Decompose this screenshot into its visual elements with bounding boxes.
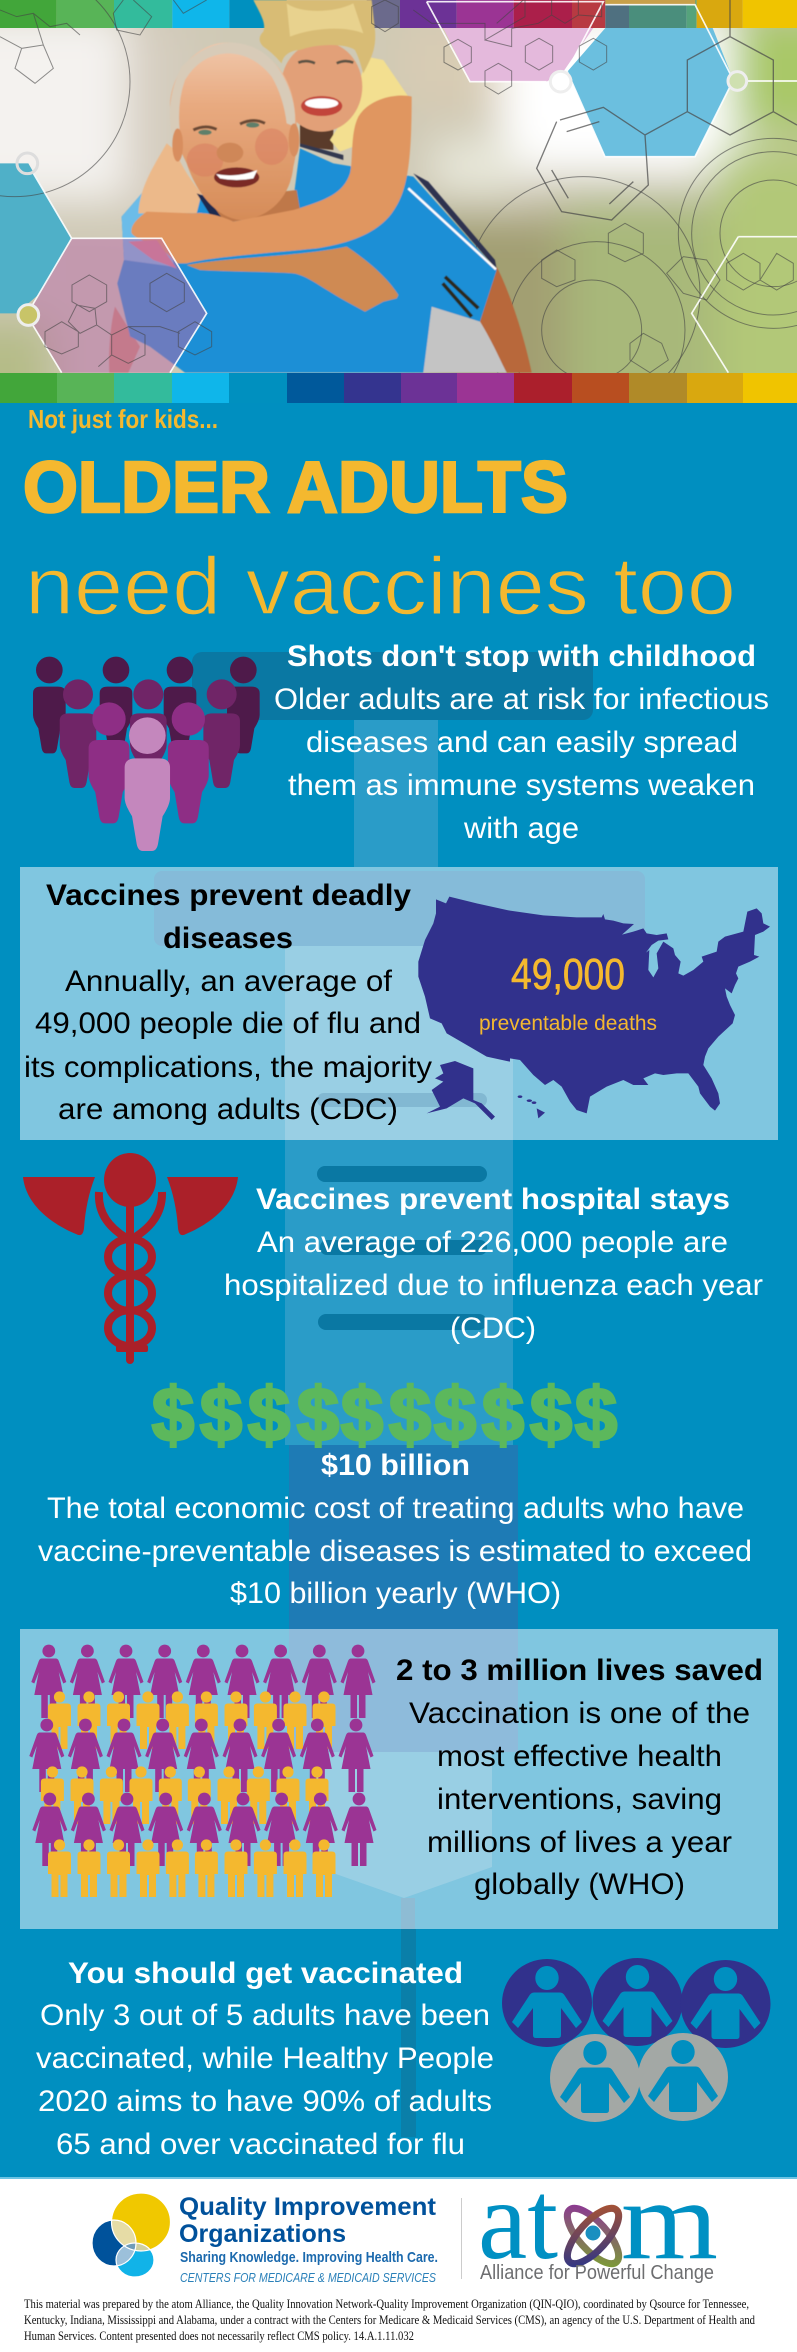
color strip bbox=[0, 373, 797, 403]
text: lives saved: globally (WHO) bbox=[474, 1868, 685, 1901]
text: lives saved: Vaccination is one of the bbox=[409, 1697, 750, 1730]
translucent circles right bbox=[0, 0, 797, 373]
text: lives saved: millions of lives a year bbox=[427, 1826, 732, 1859]
text: shots don't stop: them as immune systems weaken bbox=[288, 769, 755, 802]
text: economic cost: vaccine-preventable diseases is estimated to exceed bbox=[38, 1535, 752, 1568]
text: shots don't stop: diseases and can easily spread bbox=[306, 726, 738, 759]
mauve hexagon bbox=[27, 238, 207, 373]
pink hexagon top bbox=[443, 28, 593, 82]
icon: 3 of 5 people bbox=[502, 1958, 770, 2122]
text: hospital stays: An average of 226,000 people are bbox=[257, 1226, 728, 1259]
text: lives saved bbox=[396, 1654, 763, 1901]
text: shots don't stop bbox=[274, 640, 769, 845]
text: get vaccinated: 2020 aims to have 90% of adults bbox=[38, 2085, 492, 2118]
text: shots don't stop: with age bbox=[463, 812, 579, 845]
icon: caduceus bbox=[23, 1153, 238, 1360]
title line 2: need vaccines too bbox=[25, 541, 736, 632]
logo: Quality Improvement Organizations: CENTERS FOR MEDICARE & MEDICAID SERVICES bbox=[180, 2271, 437, 2285]
text: economic cost bbox=[38, 1449, 752, 1610]
logo: atom Alliance bbox=[478, 2159, 718, 2284]
title line 1: OLDER ADULTS bbox=[23, 448, 568, 528]
syringe watermark bbox=[192, 652, 593, 2137]
couple bbox=[109, 0, 532, 373]
stat: 49,000: 49,000 bbox=[511, 950, 625, 999]
molecule line drawings bbox=[0, 0, 797, 373]
text: lives saved: most effective health bbox=[437, 1740, 722, 1773]
fine print: Human Services. Content presented does not necessarily reflect CMS policy. 14.A.1.11.032 bbox=[24, 2328, 414, 2343]
text: hospital stays: hospitalized due to influenza each year bbox=[224, 1269, 763, 1302]
logo: atom Alliance: at bbox=[478, 2159, 558, 2283]
text: lives saved: interventions, saving bbox=[437, 1783, 722, 1816]
icon: dollar signs: $$$$$$$$$$ bbox=[152, 1373, 617, 1458]
kicker: Not just for kids... bbox=[28, 404, 218, 434]
text: economic cost: The total economic cost of treating adults who have bbox=[47, 1492, 744, 1525]
hero photo bbox=[0, 0, 797, 373]
color strip behind photo bbox=[0, 0, 797, 28]
fine print bbox=[24, 2296, 755, 2343]
photo background bbox=[0, 0, 797, 373]
logo: Quality Improvement Organizations bbox=[92, 2193, 438, 2285]
logo: Quality Improvement Organizations: Organizations bbox=[179, 2220, 346, 2248]
text: deadly diseases: are among adults (CDC) bbox=[58, 1093, 398, 1126]
text: economic cost: $10 billion yearly (WHO) bbox=[230, 1577, 561, 1610]
text: deadly diseases: Annually, an average of bbox=[65, 965, 393, 998]
text: hospital stays: (CDC) bbox=[450, 1312, 536, 1345]
icon: grid of people bbox=[29, 1645, 377, 1897]
logo: atom Alliance: m bbox=[621, 2159, 718, 2283]
text: lives saved: 2 to 3 million lives saved bbox=[396, 1654, 763, 1687]
text: shots don't stop: Shots don't stop with childhood bbox=[287, 640, 756, 673]
text: deadly diseases: 49,000 people die of flu and bbox=[35, 1007, 421, 1040]
text: hospital stays bbox=[224, 1183, 763, 1345]
text: deadly diseases: Vaccines prevent deadly bbox=[46, 879, 411, 912]
text: shots don't stop: Older adults are at risk for infectious bbox=[274, 683, 769, 716]
text: hospital stays: Vaccines prevent hospital stays bbox=[256, 1183, 730, 1216]
teal hexagon left bbox=[0, 163, 72, 313]
blue hexagon top right bbox=[567, 28, 733, 157]
footer band bbox=[0, 2159, 797, 2352]
panel: lives saved bbox=[20, 1629, 778, 1929]
map: United States bbox=[418, 897, 770, 1120]
text: deadly diseases bbox=[24, 879, 432, 1126]
text: deadly diseases: its complications, the majority bbox=[24, 1051, 432, 1084]
logo: atom Alliance: Alliance for Powerful Change bbox=[480, 2262, 714, 2284]
icon: crowd bbox=[33, 657, 260, 851]
text: get vaccinated: 65 and over vaccinated for flu bbox=[56, 2128, 465, 2161]
text: get vaccinated: You should get vaccinated bbox=[68, 1957, 463, 1990]
text: get vaccinated: vaccinated, while Healthy People bbox=[36, 2042, 494, 2075]
text: get vaccinated bbox=[36, 1957, 494, 2161]
logo: Quality Improvement Organizations: Quality Improvement bbox=[179, 2193, 437, 2221]
hexagon outlines and nodes bbox=[17, 2, 797, 373]
stat label: preventable deaths bbox=[479, 1012, 657, 1035]
text: deadly diseases: diseases bbox=[163, 922, 293, 955]
text: economic cost: $10 billion bbox=[321, 1449, 470, 1482]
panel: deadly diseases bbox=[20, 867, 778, 1140]
text: get vaccinated: Only 3 out of 5 adults have been bbox=[40, 1999, 490, 2032]
logo: Quality Improvement Organizations: Sharing Knowledge. Improving Health Care. bbox=[180, 2249, 438, 2266]
